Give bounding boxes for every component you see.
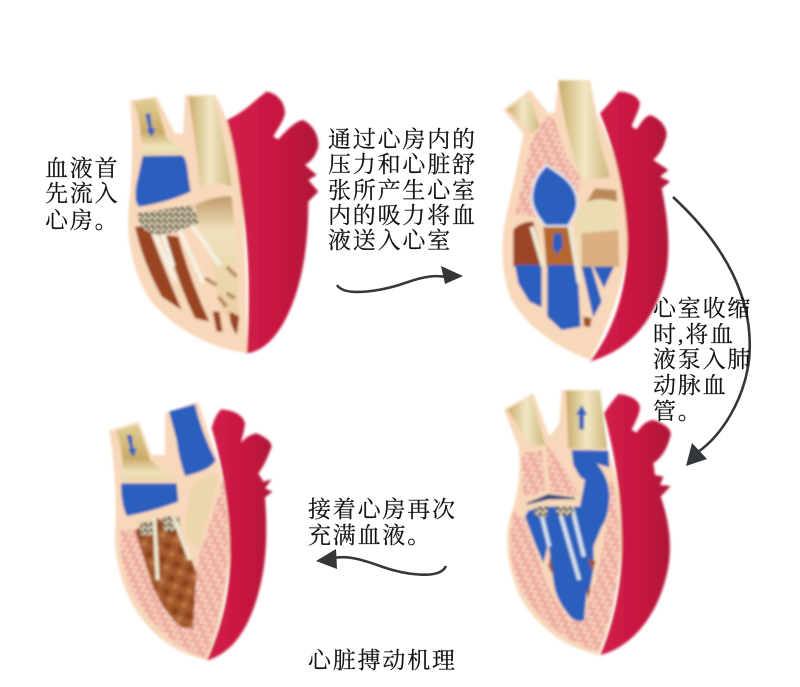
text: step 3: 心室收缩: [653, 296, 752, 321]
heart 3 chordae: [540, 507, 584, 580]
heart 1 left ventricle chamber: [195, 196, 239, 333]
heart 4 valve dots: [140, 516, 180, 535]
heart 3 wall muscle: [510, 473, 619, 652]
heart 1 chordae strands: [148, 220, 220, 283]
text: step 4: 接着心房再次: [308, 497, 457, 522]
heart 3 red outer wall: [600, 394, 671, 655]
heart 1 red outer wall: [227, 92, 318, 353]
heart 4 left chamber: [185, 474, 219, 550]
heart 3 upper vessels: [507, 396, 545, 445]
heart 4 wall muscle: [121, 480, 228, 658]
heart 2 upper vessels: [507, 95, 540, 133]
heart 2 ventricle top left: [513, 222, 545, 267]
heart 2 ventricle blood: [515, 265, 614, 330]
heart 1 tissue: [128, 95, 247, 353]
heart 4 atrium blood: [121, 483, 178, 516]
heart 4: atrium refills: [109, 402, 272, 661]
heart 1 blood arrow: [145, 113, 155, 137]
text: step 2: 通过心房内的: [328, 127, 477, 152]
title: 心脏搏动机理: [308, 648, 457, 673]
text: step 1: 血液首: [45, 156, 119, 181]
heart 3 blood arrow: [576, 405, 587, 429]
arrow: atrium refill: [316, 549, 446, 575]
heart 2 tissue: [502, 80, 628, 360]
heart 2 apex muscle: [583, 317, 592, 327]
heart 3: ventricle contracts: [504, 390, 671, 655]
text: step 4: 充满血液。: [308, 523, 432, 548]
text: step 1: 心房。: [45, 208, 119, 233]
heart 3 valve: [527, 495, 575, 504]
text: step 3: 液泵入肺: [653, 347, 752, 372]
heart 4 chordae: [154, 517, 190, 580]
heart 3 valve dots: [535, 506, 573, 517]
text: step 2: 压力和心脏舒: [328, 152, 477, 177]
heart 1 valve dots: [137, 205, 200, 235]
heart 4 pulmonary blood: [169, 404, 216, 476]
heart 2 chordae: [532, 227, 579, 283]
text: step 3: 动脉血: [653, 373, 727, 398]
heart 2 ventricle top center: [543, 227, 578, 267]
heart 1 atrium blood: [135, 155, 191, 207]
heart 3 septum muscle: [522, 443, 580, 497]
heart 4 blood arrow: [127, 435, 137, 457]
heart 2 septum muscle: [515, 117, 580, 217]
text: step 2: 液送入心室: [328, 228, 452, 253]
arrow: ventricle contraction: [673, 197, 750, 466]
heart 4 upper atrium: [116, 425, 175, 481]
heart 1 ventricle muscle: [135, 227, 239, 335]
arrow: atrium to ventricle: [337, 266, 463, 292]
heart 3 blood: [525, 450, 609, 621]
heart 4 ventricle muscle: [135, 518, 197, 628]
heart 1: blood enters atrium: [128, 92, 318, 353]
heart 3 apex muscle: [548, 557, 596, 600]
text: step 1: 先流入: [45, 181, 119, 206]
text: step 3: 时,将血: [653, 322, 735, 347]
heart 2 red outer wall: [590, 92, 670, 362]
text: step 2: 内的吸力将血: [328, 203, 477, 228]
heart 2 left chamber: [576, 188, 619, 267]
heart 2: blood flows into ventricle: [502, 80, 670, 362]
heart 3 tissue: [504, 390, 622, 655]
heart 4 tissue: [109, 402, 230, 660]
heart 2 atrium blood: [532, 165, 577, 226]
text: step 3: 管。: [653, 399, 703, 424]
heart 1 upper vessels: [133, 98, 188, 155]
heart 4 red outer wall: [207, 409, 272, 661]
text: step 2: 张所产生心室: [328, 178, 477, 203]
heart 2 blood arrow: [553, 233, 563, 255]
